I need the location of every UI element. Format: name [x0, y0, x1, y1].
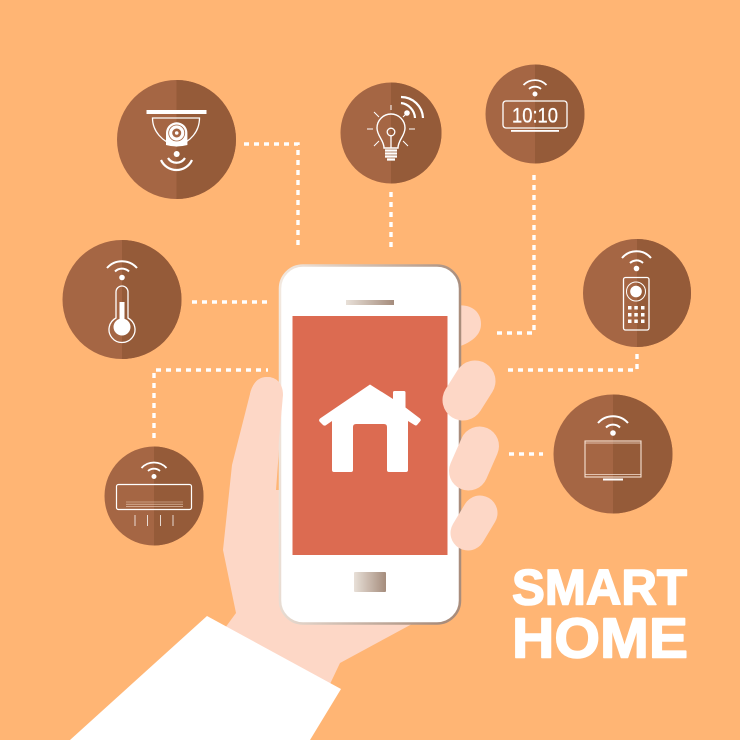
top finger: [455, 305, 481, 347]
icon: security camera: [117, 80, 236, 199]
finger three: [468, 446, 480, 471]
sleeve and hand: [70, 305, 481, 740]
dashed connector: bulb to phone: [389, 192, 393, 250]
title: smart home: [512, 560, 688, 670]
icon: remote control: [583, 239, 691, 347]
icon: digital clock: 10:10: [512, 104, 558, 128]
finger four: [468, 513, 480, 533]
title: smart home: SMART: [512, 560, 687, 616]
icon: television: [554, 394, 673, 514]
dashed connector: remote to phone: [504, 354, 637, 370]
dashed connector: TV to phone: [509, 452, 543, 456]
icon: digital clock: [486, 64, 584, 164]
icon: light bulb: [340, 82, 442, 184]
home button: [354, 572, 386, 592]
screen: [292, 316, 448, 555]
speaker: [346, 300, 394, 305]
icon: air conditioner: [104, 446, 204, 546]
finger two: [463, 381, 475, 400]
shirt sleeve: [70, 616, 341, 740]
dashed connector: clock to phone: [495, 175, 534, 333]
dashed connector: camera to phone: [244, 144, 298, 246]
thumb tip over phone edge: [250, 377, 283, 465]
smartphone: [280, 266, 460, 624]
dashed connector: air conditioner to phone: [154, 370, 268, 438]
palm: [223, 377, 440, 684]
title: smart home: HOME: [512, 606, 688, 670]
dashed connector: thermometer to phone: [192, 300, 267, 304]
icon: thermometer: [62, 240, 182, 359]
fingers over the phone: [250, 377, 480, 533]
icon: house: [319, 384, 421, 472]
